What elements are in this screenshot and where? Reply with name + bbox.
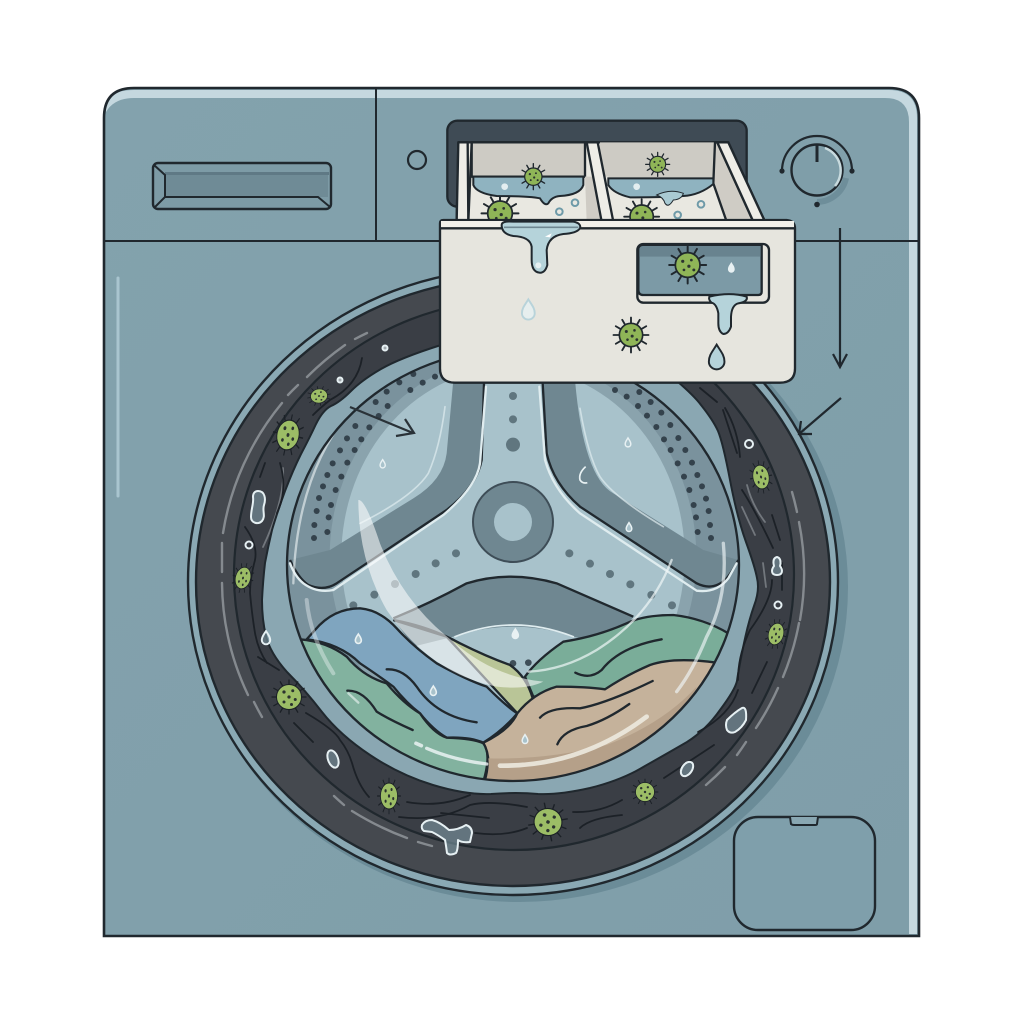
water in left compartment [473,177,583,204]
germs on gasket [229,384,790,846]
machine body [104,88,919,936]
germ on drawer front [613,317,648,352]
drum hub [473,482,553,562]
laundry: pale cloth [393,620,533,713]
falling drop [709,345,724,369]
drawer window [637,244,769,303]
detergent drawer [440,121,795,383]
detergent handle recess [153,163,331,209]
drawer slot [447,121,747,207]
spoke highlights [290,387,737,637]
water droplets on gasket [246,346,782,854]
indicator light [408,151,426,169]
bubbles [501,183,704,218]
gasket folds [245,358,782,834]
arrow: down the front panel [833,228,847,367]
service hatch [734,817,875,930]
drip from window [709,294,747,334]
germs in water [520,152,670,190]
laundry: left green cloth [290,639,487,782]
gasket highlight streaks [222,333,804,846]
drip over right compartment [657,191,683,205]
door glass and drum [280,343,747,787]
glass reflections [293,413,724,766]
door gasket [188,269,848,902]
arrow: to gasket [799,398,841,434]
drum perforations [311,371,714,541]
illustration: washing machine with mould [102,86,920,938]
drum spokes [290,380,738,647]
cloth wrinkles [347,639,662,744]
water in right compartment [608,178,713,197]
laundry: blue cloth [307,608,517,743]
drawer tray [457,142,765,222]
droplets inside drum [355,438,632,744]
control dial [779,136,855,207]
drawer front panel [440,220,795,383]
pale drop [522,299,535,320]
drum holes [349,392,676,667]
germ in window [669,246,706,283]
laundry: tan cloth [483,660,717,787]
drum back [288,362,738,669]
laundry: right green cloth [525,615,728,697]
germs behind the drawer front [481,195,659,234]
drip on drawer lip [502,221,580,273]
door lip [262,320,758,794]
arrow: into drum [350,407,414,436]
